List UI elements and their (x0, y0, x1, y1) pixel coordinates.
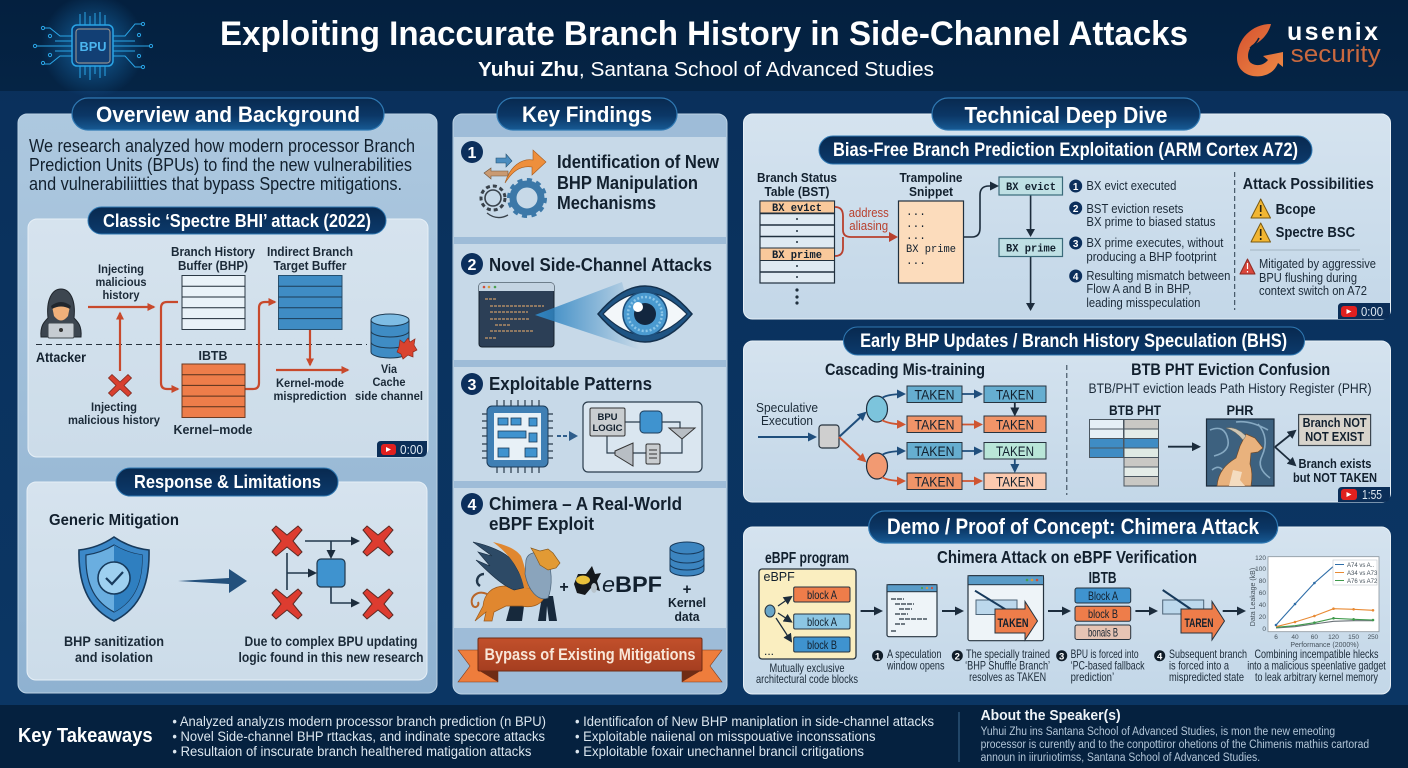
arrow: mitigation to limitation (178, 569, 247, 593)
text block: overview intro: Prediction Units (BPUs) to find the new vulnerabilities (29, 155, 412, 175)
video badge 0:00 (377, 441, 427, 457)
diagram: cascading tree: Speculative (756, 400, 818, 415)
arrows: chimera flow (861, 610, 1244, 612)
step 3: BX prime executes, without (1086, 235, 1224, 250)
chart: data leakage vs performance: 100 (1255, 566, 1266, 573)
label: kernel-mode misprediction (274, 376, 346, 403)
chart: data leakage vs performance: 6 (1274, 634, 1278, 641)
chart: data leakage vs performance: 150 (1348, 634, 1359, 641)
title: Exploiting Inaccurate Branch History in Side-Channel Attacks (220, 15, 1188, 53)
label: branch exists but not taken: but NOT TAKEN (1293, 470, 1377, 485)
chart: data leakage vs performance: A34 vs A73 (1347, 571, 1378, 577)
about the speaker: processor is curently and to the conpottiror ohetions of the Chimenis mathiıs cartorad (981, 739, 1369, 751)
heading: technical deep dive: Technical Deep Dive (964, 102, 1168, 128)
caption 2: resolves as TAKEN (969, 670, 1046, 684)
list: takeaways column 2: • Identificafon of New BHP maniplation in side-channel attacks (575, 714, 934, 729)
caption 1: window opens (886, 658, 944, 672)
heading: overview and background: Overview and Background (96, 102, 360, 127)
text: mutually exclusive (756, 661, 858, 686)
heading: overview and background (72, 98, 384, 130)
box: branch not exist: Branch NOT (1303, 415, 1367, 430)
list: takeaways column 2: • Exploitable naiienal on misspouative inconssations (575, 729, 876, 744)
icon: warning bcope (1251, 199, 1270, 218)
footer band (0, 705, 1408, 768)
label: spectre BSC: Spectre BSC (1276, 224, 1355, 241)
heading: early BHP updates (844, 327, 1304, 355)
step 4: Resulting mismatch between (1086, 268, 1230, 283)
label: plus kernel data: + (683, 581, 692, 598)
subheading: chimera attack on eBPF: Chimera Attack on eBPF Verification (937, 547, 1197, 567)
flow: BX evict to BX prime: BX evict (1006, 182, 1056, 194)
about the speaker: About the Speaker(s) (981, 708, 1121, 724)
panel: overview and background (18, 98, 437, 693)
label: via cache side channel: Via (381, 362, 397, 376)
label: BHP sanitization (64, 633, 164, 665)
icon: BPU chip (33, 0, 153, 98)
number badge 3: 3 (468, 377, 477, 394)
heading: key findings: Key Findings (522, 102, 652, 127)
arrow: trampoline to BX evict (964, 186, 997, 237)
step captions (872, 647, 1386, 684)
plus sign: + (559, 579, 569, 596)
box: eBPF program blocks: block A (807, 615, 837, 629)
label: plus kernel data (668, 581, 706, 624)
trampoline snippet (898, 170, 964, 283)
trampoline snippet: ... (906, 219, 926, 231)
label: via cache side channel (355, 362, 423, 403)
logo: usenix security: usenix (1287, 18, 1378, 46)
step 4: Flow A and B in BHP, (1086, 281, 1191, 296)
image: PHR goat: PHR (1226, 403, 1254, 418)
label: injecting malicious history top: history (102, 288, 140, 302)
caption 2: 2 (955, 652, 960, 662)
video badge 0:00 (1338, 303, 1390, 319)
chart: data leakage vs performance: A74 vs A.. (1347, 563, 1374, 569)
caption 2: ‘BHP Shuffle Branch’ (965, 658, 1050, 672)
label: injecting malicious history bottom: malicious history (68, 413, 160, 427)
number badge 3 (461, 373, 483, 395)
number badge 4: 4 (468, 497, 477, 514)
arrow: injection to branch buffers (88, 302, 348, 389)
icon: kernel data database (670, 542, 704, 576)
diagram: cascading tree: TAKEN (996, 416, 1034, 432)
heading: key takeaways: Key Takeaways (18, 725, 153, 747)
icon: eye with cone (535, 282, 692, 350)
chart: data leakage vs performance (1250, 555, 1379, 649)
label: eBPF logo: eBPF (602, 572, 662, 597)
heading: response and limitations: Response & Limitations (134, 472, 321, 492)
about the speaker: announ in iiruriıotimss, Santana School of Advanced Studies. (981, 752, 1260, 764)
table: IBTB kernel-mode (174, 348, 252, 437)
caption 4: 4 (1157, 652, 1163, 662)
video badge 0:00: 0:00 (1361, 305, 1383, 319)
diagram: BPU logic: BPU (597, 412, 618, 423)
panel: response and limitations (27, 468, 427, 680)
text: finding 1 (557, 152, 720, 213)
icon: taken window: TAKEN (998, 616, 1028, 630)
table: indirect branch target buffer: Target Buffer (274, 259, 347, 273)
chart: data leakage vs performance: 20 (1259, 614, 1266, 621)
finding 1 (461, 141, 720, 218)
stack: IBTB blocks (1075, 570, 1131, 640)
heading: response and limitations (116, 468, 338, 496)
icon: code window (479, 283, 554, 347)
step 1: 1 (1073, 182, 1079, 193)
heading: demo (869, 511, 1278, 543)
subheading: cascading mis-training: Cascading Mis-training (825, 361, 985, 379)
number badge 1: 1 (468, 145, 477, 162)
box: eBPF program blocks: eBPF (764, 570, 795, 584)
diagram: BPU logic: LOGIC (592, 423, 623, 434)
table: branch history buffer: Branch History (171, 245, 255, 259)
heading: classic spectre BHI: Classic ‘Spectre BHI’ attack (2022) (103, 211, 371, 231)
icon: mispredicted taken arrow (1163, 590, 1224, 640)
list: takeaways column 2 (575, 714, 934, 759)
label: attacker: Attacker (36, 349, 86, 365)
text: finding 4 (489, 493, 682, 534)
chart: data leakage vs performance: 60 (1259, 590, 1266, 597)
step 2: 2 (1073, 204, 1079, 215)
attack possibilities (1240, 176, 1376, 298)
icon: warning spectre BSC (1251, 223, 1270, 242)
text: finding 3: Exploitable Patterns (489, 373, 652, 394)
step 2: BST eviction resets (1086, 201, 1184, 216)
about the speaker: Yuhui Zhu ins Santana School of Advanced Studies, is mon the new emeoting (981, 726, 1335, 738)
label: injecting malicious history top: malicious (96, 275, 147, 289)
heading: bias-free exploitation (819, 136, 1312, 164)
step 4: 4 (1073, 272, 1079, 283)
label: BHP sanitization: BHP sanitization (64, 633, 164, 649)
label: plus kernel data: data (674, 610, 701, 624)
logo: usenix security (1237, 18, 1381, 76)
trampoline snippet: ... (906, 231, 926, 243)
step 4: leading misspeculation (1086, 295, 1200, 310)
text block: overview intro: and vulnerabiliitties that bypass Spectre mitigations. (29, 174, 402, 194)
box: eBPF program blocks: block A (807, 588, 837, 602)
arrow: table to PHR (1168, 446, 1199, 448)
label: kernel-mode misprediction: Kernel-mode (276, 376, 344, 390)
label: branch exists but not taken: Branch exists (1298, 456, 1372, 471)
caption 2: The specially trained (966, 647, 1050, 661)
caption 3: prediction’ (1071, 670, 1114, 684)
label: injecting malicious history top: Injecting (98, 262, 144, 276)
diagram: cascading tree: TAKEN (914, 386, 954, 402)
label: branch exists but not taken (1293, 456, 1377, 485)
arrow: address aliasing: aliasing (849, 218, 888, 233)
heading: technical deep dive (932, 98, 1200, 130)
label: kernel-mode misprediction: misprediction (274, 389, 346, 403)
icon: red X (108, 374, 132, 396)
panel: early BHP updates (744, 327, 1390, 502)
text block: overview intro (29, 136, 415, 194)
icon: code window (887, 585, 937, 637)
label: injecting malicious history bottom: Injecting (91, 400, 137, 414)
flow: BX evict to BX prime: BX prime (1006, 244, 1056, 256)
list: takeaways column 1: • Analyzed analyzıs modern processor branch prediction (n BPU) (172, 714, 546, 729)
chart: data leakage vs performance: 0 (1262, 626, 1266, 633)
list: takeaways column 2: • Exploitable foxair unechannel brancil critigations (575, 744, 864, 759)
table: IBTB kernel-mode: Kernel–mode (174, 422, 252, 437)
diagram: cascading tree: TAKEN (914, 474, 954, 490)
label: due to complex BPU logic: Due to complex BPU updating (244, 633, 418, 649)
trampoline snippet: BX prime (906, 244, 956, 256)
chart: data leakage vs performance: Performance (2000%) (1290, 642, 1359, 649)
icon: eBPF bee (574, 566, 601, 595)
finding 2 (461, 253, 712, 350)
diagram: failed mitigation paths (272, 526, 393, 619)
icon: shield (79, 537, 149, 621)
icon: chimera (472, 542, 560, 621)
table: indirect branch target buffer (267, 245, 353, 330)
steps: bias-free numbered list (1069, 178, 1230, 310)
text: mitigated note: context switch on A72 (1259, 283, 1367, 298)
stack: IBTB blocks: block B (1088, 607, 1118, 621)
chart: data leakage vs performance: 120 (1328, 634, 1339, 641)
label: due to complex BPU logic (238, 633, 424, 665)
text: mutually exclusive: architectural code blocks (756, 672, 858, 686)
icon: attacker (41, 289, 81, 338)
trampoline snippet: ... (906, 256, 926, 268)
chart: data leakage vs performance: 250 (1368, 634, 1379, 641)
label: via cache side channel: Cache (372, 375, 406, 389)
text: mitigated note (1259, 256, 1376, 298)
box: branch not exist (1299, 414, 1371, 446)
chart: data leakage vs performance: 40 (1291, 634, 1299, 641)
diagram: cascading tree: Execution (761, 413, 813, 428)
panel: key findings (453, 98, 727, 694)
banner: bypass of existing mitigations: Bypass of Existing Mitigations (484, 646, 696, 664)
header band (0, 0, 1408, 98)
number badge 2: 2 (468, 257, 477, 274)
caption 5 (1247, 647, 1386, 684)
table: BTB PHT (1090, 403, 1162, 486)
label: generic mitigation: Generic Mitigation (49, 512, 179, 529)
caption 3: BPU is forced into (1071, 647, 1139, 661)
panel: demo proof of concept (744, 511, 1390, 694)
text: mutually exclusive: Mutually exclusive (770, 661, 845, 675)
table: branch status table: BX ev1ct (772, 203, 822, 215)
diagram: cascading tree: TAKEN (914, 443, 954, 459)
video badge 1:55: 1:55 (1362, 488, 1382, 502)
arrow: address aliasing (835, 205, 898, 256)
table: branch history buffer: Buffer (BHP) (178, 259, 248, 273)
table: branch status table: Branch Status (757, 170, 837, 185)
table: branch status table (757, 170, 837, 305)
subtitle: author and school: Yuhui Zhu, Santana School of Advanced Studies (478, 59, 934, 81)
step 1: BX evict executed (1086, 178, 1176, 193)
arrow: address aliasing: address (849, 205, 889, 220)
table: branch status table: BX prime (772, 250, 822, 262)
icon: cache database with bug (371, 314, 417, 359)
trampoline snippet: ... (906, 207, 926, 219)
heading: classic spectre BHI (88, 207, 386, 234)
list: takeaways column 1: • Resultaion of inscurate branch healthered matigation attacks (172, 744, 532, 759)
text: finding 4: Chimera – A Real-World (489, 493, 682, 514)
arrows: PHR to outcomes (1275, 431, 1295, 465)
finding 3 (461, 373, 702, 473)
caption 3 (1056, 647, 1145, 684)
panel: classic spectre BHI attack (28, 207, 428, 457)
banner: bypass of existing mitigations (458, 638, 722, 682)
text: BTB/PHT eviction: BTB/PHT eviction leads Path History Register (PHR) (1088, 380, 1372, 396)
text: mitigated note: Mitigated by aggressive (1259, 256, 1376, 271)
list: takeaways column 1 (172, 714, 546, 759)
step 4 (1069, 268, 1230, 310)
icon: taken window (968, 576, 1044, 641)
caption 1: 1 (875, 652, 881, 662)
table: branch status table: Table (BST) (764, 184, 830, 199)
stack: IBTB blocks: bonals B (1088, 626, 1118, 640)
logo: usenix security: security (1291, 41, 1381, 68)
step 3: 3 (1073, 239, 1079, 250)
text: finding 2: Novel Side-Channel Attacks (489, 254, 712, 275)
chart: data leakage vs performance: Data Leakage (kB) (1250, 568, 1257, 626)
caption 1: A speculation (887, 647, 942, 661)
caption 4: mispredicted state (1169, 670, 1244, 684)
box: eBPF program blocks: block B (807, 638, 837, 652)
heading: early BHP updates: Early BHP Updates / Branch History Speculation (BHS) (860, 331, 1287, 352)
caption 4: Subsequent branch (1169, 647, 1247, 661)
chart: data leakage vs performance: 80 (1259, 578, 1266, 585)
heading: key findings (497, 98, 677, 130)
list: takeaways column 1: • Novel Side-channel BHP rttackas, and indinate specore attacks (172, 729, 545, 744)
about the speaker (981, 708, 1369, 764)
step 2: BX prime to biased status (1086, 214, 1216, 229)
step 3 (1069, 235, 1224, 264)
caption 1 (872, 647, 944, 672)
step 2 (1069, 201, 1216, 229)
diagram: cascading tree: TAKEN (914, 416, 954, 432)
text: finding 1: BHP Manipulation (557, 173, 698, 193)
label: via cache side channel: side channel (355, 389, 423, 403)
icon: mispredicted taken arrow: TAREN (1184, 616, 1214, 630)
flow: BX evict to BX prime (999, 177, 1062, 311)
caption 3: 3 (1059, 652, 1064, 662)
diagram: cascading tree (756, 386, 1046, 490)
chart: data leakage vs performance: 60 (1311, 634, 1318, 641)
finding 4 (461, 493, 706, 624)
box: eBPF program blocks (759, 569, 856, 659)
arrow: chip to logic (557, 431, 578, 441)
heading: bias-free exploitation: Bias-Free Branch Prediction Exploitation (ARM Cortex A72) (833, 140, 1298, 161)
caption 2 (952, 647, 1050, 684)
video badge 1:55 (1338, 487, 1390, 502)
number badge 1 (461, 141, 483, 163)
text: finding 4: eBPF Exploit (489, 513, 594, 534)
caption 3: ‘PC-based fallback (1071, 658, 1145, 672)
trampoline snippet: Trampoline (900, 170, 962, 185)
caption 4: is forced into a (1169, 658, 1229, 672)
chart: data leakage vs performance: 120 (1255, 555, 1266, 562)
panel: bias-free branch prediction (744, 98, 1390, 319)
label: injecting malicious history top (96, 262, 147, 302)
text: finding 1: Identification of New (557, 152, 720, 172)
label: bcope: Bcope (1276, 201, 1316, 218)
diagram: cascading tree: TAKEN (996, 443, 1034, 459)
icon: chip layout (482, 400, 553, 473)
diagram: cascading tree: TAKEN (996, 386, 1034, 402)
table: indirect branch target buffer: Indirect Branch (267, 245, 353, 259)
caption 4 (1154, 647, 1247, 684)
icon: red warning (1240, 259, 1255, 274)
icon: BPU chip: BPU (80, 39, 106, 54)
text: finding 1: Mechanisms (557, 193, 656, 213)
table: BTB PHT: BTB PHT (1109, 403, 1162, 418)
diagram: cascading tree: TAKEN (996, 474, 1034, 490)
number badge 4 (461, 493, 483, 515)
label: due to complex BPU logic: logic found in this new research (238, 649, 424, 665)
subheading: eBPF program: eBPF program (765, 550, 849, 567)
attack possibilities: Attack Possibilities (1243, 176, 1374, 193)
trampoline snippet: Snippet (909, 184, 954, 199)
table: branch history buffer (171, 245, 255, 330)
video badge 0:00: 0:00 (400, 443, 423, 457)
diagram: BPU logic (583, 402, 702, 472)
stack: IBTB blocks: IBTB (1089, 570, 1117, 587)
box: eBPF program blocks: ... (764, 644, 774, 658)
heading: demo: Demo / Proof of Concept: Chimera Attack (887, 514, 1260, 539)
box: branch not exist: NOT EXIST (1305, 429, 1364, 444)
number badge 2 (461, 253, 483, 275)
table: IBTB kernel-mode: IBTB (198, 348, 228, 363)
chart: data leakage vs performance: A76 vs A72 (1347, 579, 1378, 585)
subheading: BTB PHT eviction confusion: BTB PHT Eviction Confusion (1131, 361, 1330, 379)
label: injecting malicious history bottom (68, 400, 160, 427)
icon: gears and arrows (481, 150, 546, 218)
text block: overview intro: We research analyzed how modern processor Branch (29, 136, 415, 156)
chart: data leakage vs performance: 40 (1259, 602, 1266, 609)
stack: IBTB blocks: Block A (1088, 589, 1118, 603)
image: PHR goat (1206, 403, 1274, 486)
step 3: producing a BHP footprint (1086, 249, 1217, 264)
text: mitigated note: BPU flushing during (1259, 270, 1357, 285)
label: plus kernel data: Kernel (668, 596, 706, 610)
label: BHP sanitization: and isolation (75, 649, 153, 665)
